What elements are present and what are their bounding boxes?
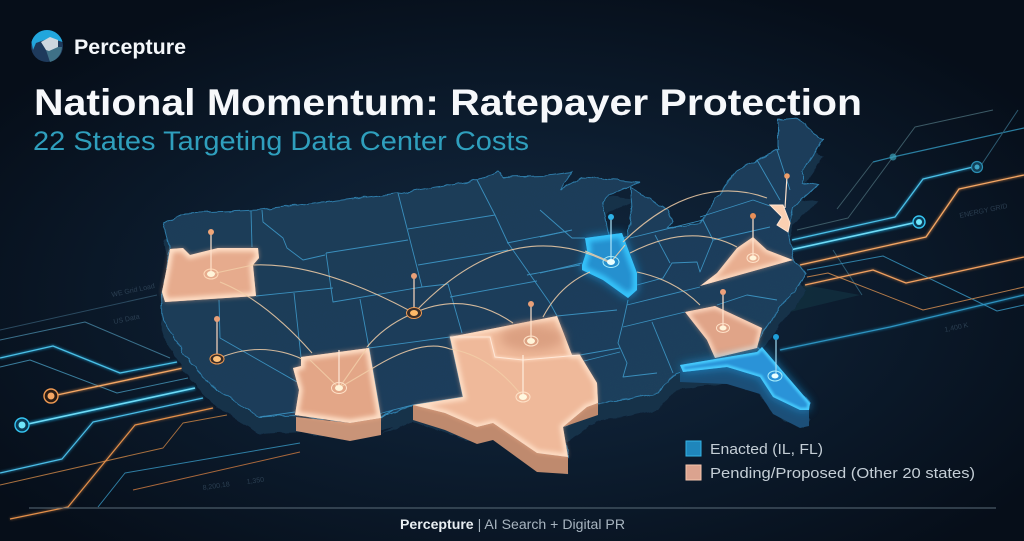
pin: Illinois [603,214,619,268]
footer rule [29,507,996,509]
state borders [219,150,790,418]
legend [686,441,975,482]
state: Arizona [293,348,381,441]
state: Georgia [685,306,762,358]
orange node [44,389,58,403]
pin: Nevada [210,316,224,364]
pin: Arizona [332,350,346,394]
state: New Jersey [770,205,790,232]
state: Virginia [700,237,793,286]
pin: Georgia [716,289,730,332]
legend: enacted: Enacted (IL, FL) [710,441,823,458]
faint background data labels: 1,350 [246,477,265,486]
right circuit lines [780,110,1024,350]
right blue node [913,216,925,228]
pin: Virginia [747,213,759,262]
footer: Percepture | AI Search + Digital PR [400,517,625,532]
state: Texas and Oklahoma [413,316,598,474]
faint background data labels: 1,400 K [944,322,969,334]
US map [162,118,823,474]
upper right node [972,162,982,172]
logo [31,30,186,62]
subtitle: 22 States Targeting Data Center Costs [33,126,529,156]
faint background data labels: US Data [113,314,140,326]
pin: Oklahoma [524,301,538,346]
state: Illinois [582,233,637,298]
pin: Texas [516,355,530,402]
legend: pending: Pending/Proposed (Other 20 states) [710,465,975,482]
faint background data labels: 8,200.18 [202,481,230,492]
map extruded side [162,135,823,474]
faint background data labels [111,203,1008,492]
title: National Momentum: Ratepayer Protection [34,82,862,123]
faint background data labels: WE Grid Load [111,283,156,299]
map top surface [162,118,823,457]
state: Oregon [162,248,259,302]
blue node [15,418,29,432]
connection arcs [211,191,767,397]
brand name: Percepture [74,36,186,59]
logo icon [31,30,63,62]
pin: Florida [768,334,782,381]
state: Florida [680,347,810,428]
pin: Nebraska [406,273,422,318]
ground panel right of coast [790,285,860,312]
left circuit lines [0,295,300,519]
location pins [204,173,790,402]
pin: New Jersey [784,173,790,208]
pin: Oregon [204,229,218,279]
faint background data labels: ENERGY GRID [959,203,1008,220]
